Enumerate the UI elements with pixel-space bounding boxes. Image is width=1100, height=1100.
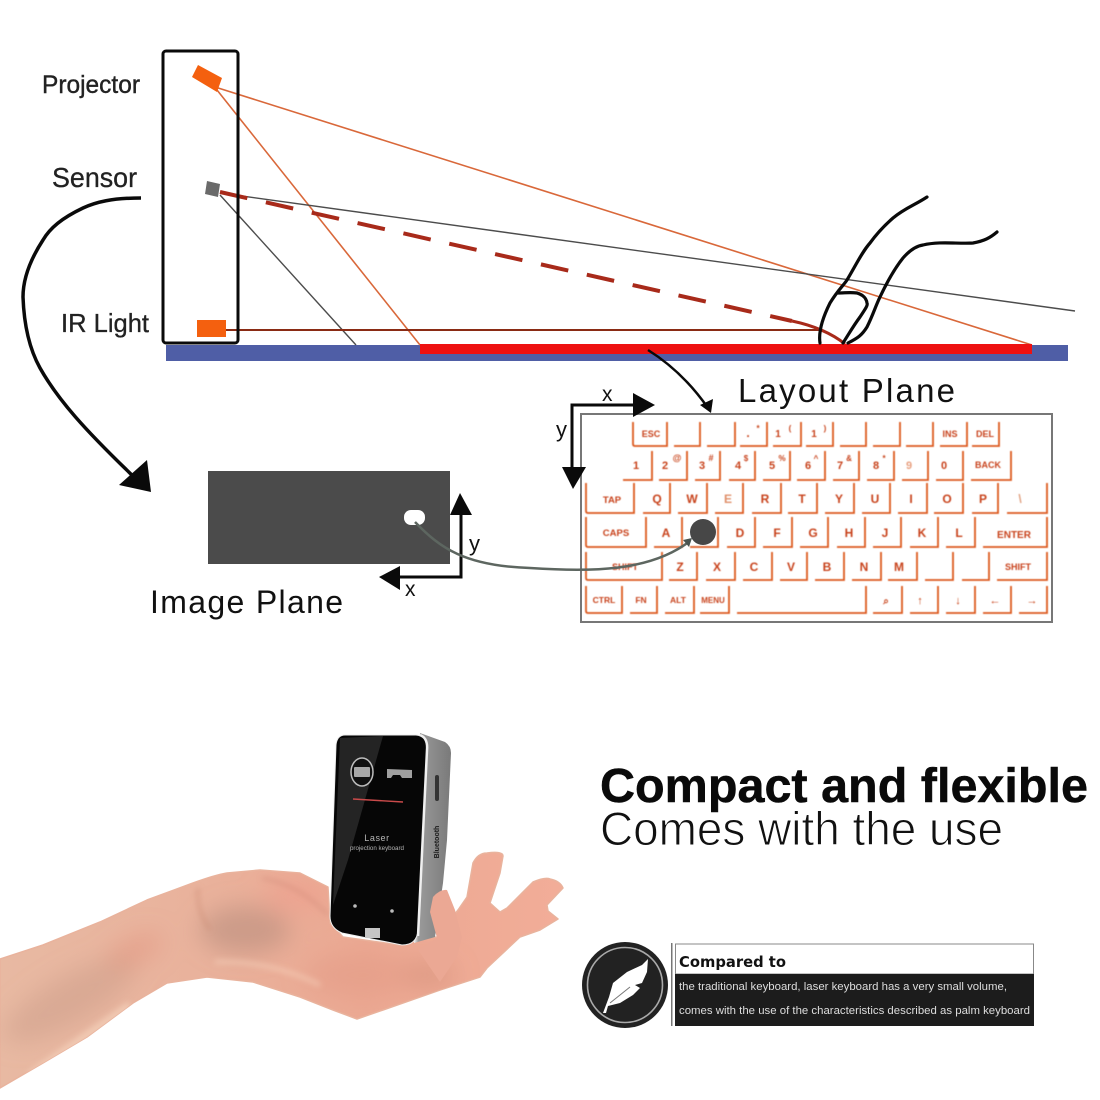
keyboard axes [556, 383, 655, 489]
key labels: 6 [805, 460, 811, 472]
base plane: blue bar [166, 345, 1068, 361]
key labels: & [846, 454, 852, 463]
side button [435, 775, 439, 801]
label: IR Light: IR Light [61, 308, 150, 338]
arrow: sensor to image plane [23, 198, 151, 492]
laser line [353, 799, 403, 802]
key labels: ↓ [955, 595, 961, 607]
device side [414, 733, 451, 943]
key labels: H [845, 526, 853, 540]
key labels: 4 [735, 460, 742, 472]
hand holding device [0, 852, 563, 1088]
key labels: MENU [701, 596, 725, 605]
key labels: 0 [941, 460, 947, 472]
key labels: 5 [769, 460, 775, 472]
label: Projector: Projector [42, 71, 140, 99]
thumb in front of device [418, 890, 462, 982]
key labels [593, 424, 1038, 607]
key labels: U [871, 492, 879, 506]
key labels: T [798, 492, 806, 506]
key labels: \ [1018, 492, 1022, 506]
key labels: E [724, 492, 732, 506]
IR light beam [226, 329, 822, 331]
key labels: CAPS [603, 528, 629, 539]
key labels: 8 [873, 460, 879, 472]
heading: Layout Plane: Layout Plane [738, 372, 955, 409]
key labels: DEL [976, 429, 995, 439]
key labels: ALT [670, 595, 687, 605]
icon: feather badge [582, 942, 668, 1028]
heading: Image Plane: Image Plane [150, 584, 343, 620]
key labels: V [787, 560, 795, 574]
keyboard axes: y [556, 417, 567, 442]
key labels: SHIFT [1005, 562, 1032, 572]
icon: IR light [197, 320, 226, 337]
beam reflection tail [792, 321, 845, 344]
device front [330, 735, 427, 945]
image plane panel [208, 471, 450, 564]
device text: Laser [364, 833, 390, 843]
key labels: ENTER [997, 530, 1032, 541]
key labels: ) [824, 424, 827, 433]
finger outline [820, 197, 997, 343]
key labels: SHIFT [612, 562, 639, 572]
key labels: W [686, 492, 698, 506]
key labels: K [918, 526, 927, 540]
bottom logo [365, 928, 380, 938]
key labels: D [736, 526, 745, 540]
glossy sheen [333, 736, 383, 905]
key labels: * [756, 424, 760, 433]
key labels: X [713, 560, 721, 574]
key labels: M [894, 560, 904, 574]
touch dots [353, 904, 394, 913]
key labels: TAP [603, 495, 622, 506]
callout: compared to: the traditional keyboard, laser keyboard has a very small volume, [679, 981, 1007, 993]
key labels: 1 [633, 460, 639, 472]
callout: compared to: Compared to [679, 953, 786, 971]
projection beams [215, 87, 1032, 345]
touch point on keyboard [690, 519, 716, 545]
key labels: P [979, 492, 987, 506]
hand shading [0, 878, 456, 1075]
reflected dashed beam [220, 192, 792, 321]
key labels: ^ [814, 454, 819, 463]
image plane axes [379, 493, 480, 601]
headline: Compact and flexible [600, 760, 1088, 813]
key labels: ⌕ [882, 596, 889, 607]
key labels: ← [990, 595, 1000, 607]
label: Sensor: Sensor [52, 162, 137, 193]
key labels: O [942, 492, 952, 506]
key labels: A [662, 526, 671, 540]
finger spot [404, 510, 425, 525]
keyboard axes: x [602, 383, 613, 406]
key labels: 2 [662, 460, 668, 472]
key labels: 3 [699, 460, 705, 472]
sensor window [387, 769, 412, 778]
key labels: CTRL [593, 595, 615, 605]
silver edge [418, 735, 427, 936]
key labels: G [808, 526, 818, 540]
icon: sensor [205, 181, 220, 197]
key labels: % [778, 454, 786, 463]
side label: Bluetooth [434, 826, 441, 858]
key labels: . [746, 426, 750, 440]
key labels: B [823, 560, 832, 574]
key labels: C [750, 560, 759, 574]
key labels: N [860, 560, 868, 574]
key labels: ESC [642, 429, 661, 439]
key labels: * [882, 454, 886, 463]
key labels: ( [789, 424, 792, 433]
key labels: @ [673, 453, 682, 463]
arrow: layout plane to keyboard [648, 350, 713, 413]
key labels: L [955, 526, 963, 540]
callout: compared to [671, 943, 1034, 1026]
logo inner [354, 767, 370, 777]
key labels: Y [835, 492, 843, 506]
key labels: Q [652, 492, 662, 506]
key labels: $ [744, 454, 749, 463]
callout: compared to: comes with the use of the characteristics described as palm keyboard [679, 1005, 1030, 1017]
key labels: 1 [811, 429, 817, 440]
layout plane: red bar [420, 344, 1032, 354]
logo ring [351, 758, 373, 786]
keyboard panel [581, 414, 1052, 622]
subheadline: Comes with the use [600, 802, 1003, 855]
key labels: F [773, 526, 781, 540]
key labels: 1 [775, 429, 781, 440]
key labels: 7 [837, 460, 843, 472]
key labels: Z [676, 560, 684, 574]
key labels: INS [942, 429, 958, 439]
key labels: # [708, 453, 714, 463]
key labels: → [1026, 595, 1038, 607]
key labels: ↑ [917, 595, 923, 607]
device: laser keyboard [330, 733, 451, 945]
key labels: I [909, 492, 913, 506]
key labels: R [761, 492, 770, 506]
key labels: FN [635, 595, 647, 605]
key labels: 9 [906, 460, 912, 472]
image plane axes: x [405, 578, 416, 601]
key labels: BACK [975, 460, 1001, 470]
image plane axes: y [469, 531, 480, 556]
key labels: J [882, 526, 888, 540]
sensor field lines [220, 193, 1075, 345]
device outline box [163, 51, 238, 343]
device subtitle: projection keyboard [350, 845, 405, 852]
mapping curve: image plane to keyboard [415, 522, 692, 570]
icon: projector [192, 65, 222, 92]
key outlines [586, 422, 1047, 613]
